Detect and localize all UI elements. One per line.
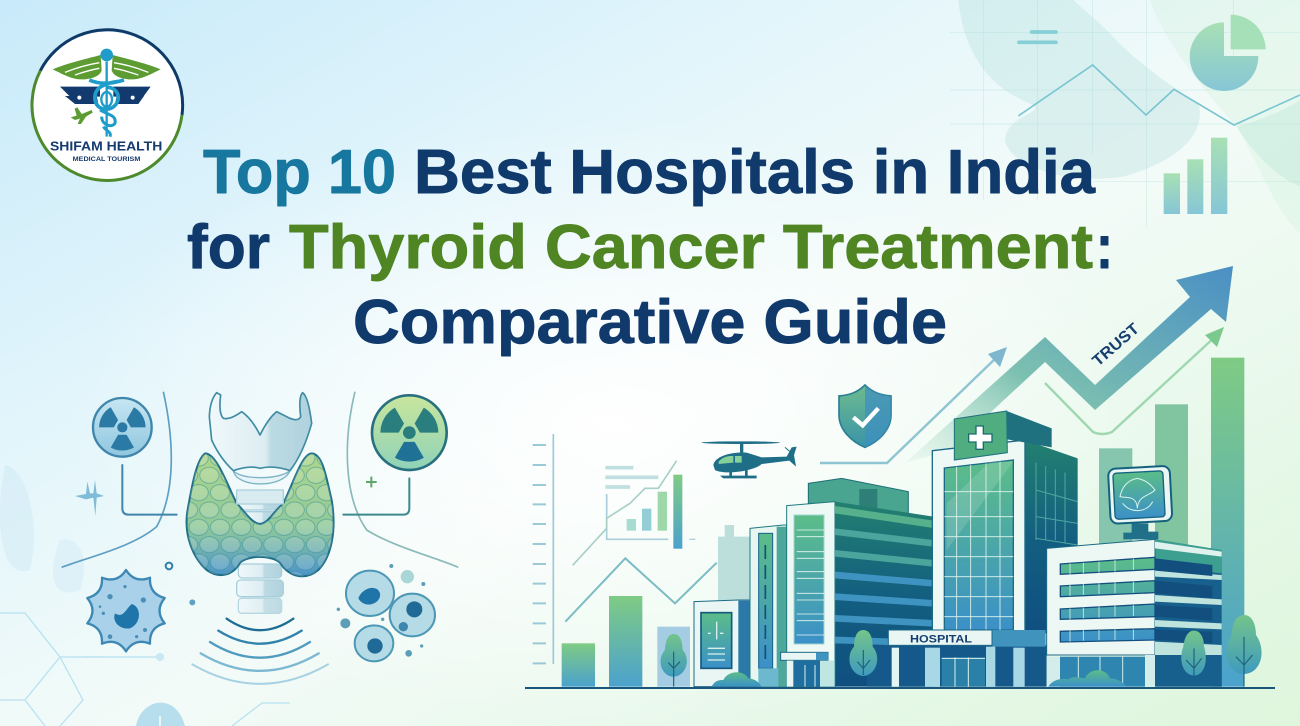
dash marks [1019,32,1056,42]
entrance [867,630,1047,687]
left chart backdrop [533,434,750,687]
ghost building [718,525,750,603]
small bar chart icon [1164,138,1227,214]
caduceus [89,49,124,137]
hospital complex center and right [867,411,1262,687]
hospital sign: HOSPITAL [910,633,972,645]
cell cluster [337,564,435,661]
title line 2: : [1096,213,1113,282]
logo name: SHIFAM HEALTH [50,139,162,154]
pie chart icon [1190,15,1266,91]
top-right data backdrop [950,0,1300,233]
ground line [525,687,1275,689]
sparkle [75,480,104,516]
title line 1: Best Hospitals in India [414,138,1096,207]
helicopter icon [701,441,797,478]
neck and body outlines [62,392,458,567]
ruler [533,434,553,664]
title line 3: Comparative Guide [353,288,947,357]
title line 2: Thyroid Cancer Treatment [289,213,1093,282]
low building [1047,539,1222,687]
right bars and arrows [1099,358,1244,687]
hospital complex left [694,478,933,687]
cross icon [969,426,992,449]
rising arrows [820,266,1233,463]
radiation icon: green [343,395,447,515]
tree by low building [1181,631,1206,677]
zigzag line [565,558,717,622]
logo tagline: MEDICAL TOURISM [73,157,140,163]
foreground trees and bushes [661,630,877,687]
title [187,138,1113,357]
sound waves [192,619,328,684]
title line 2: for [187,213,270,282]
thin blue arrow [820,347,1007,463]
thyroid gland [187,453,334,576]
left background motifs [0,465,290,726]
title line 1: Top 10 [203,138,396,207]
thin green arrow [1045,327,1224,434]
shield icon [839,385,891,447]
thyroid illustration [62,392,458,684]
main block [781,478,933,687]
trust arrow [905,266,1233,463]
small trend chart [573,461,695,565]
entrance canopy [781,652,828,660]
tree right [1226,615,1262,687]
plane icon [71,107,93,124]
tree by main block [849,630,877,676]
roof cross box [1007,411,1052,447]
radiation icon: blue [93,398,177,515]
line chart [1018,65,1300,125]
logo [32,30,183,182]
small clinic building [694,600,752,687]
wings [53,55,161,79]
mutated cell [87,563,195,651]
left bars [562,596,690,687]
trachea [237,493,283,613]
tree by clinic [661,634,687,687]
right bars [1099,358,1244,687]
navy bars [60,87,151,104]
bushes [1048,670,1127,687]
bush [712,672,762,687]
logo disc [32,32,182,182]
slim tower [750,525,787,687]
larynx cartilage [209,393,312,504]
glass tower [932,411,1078,633]
trust label: TRUST [1089,320,1143,370]
hospital sign [888,630,992,645]
monitor icon [1108,466,1172,539]
